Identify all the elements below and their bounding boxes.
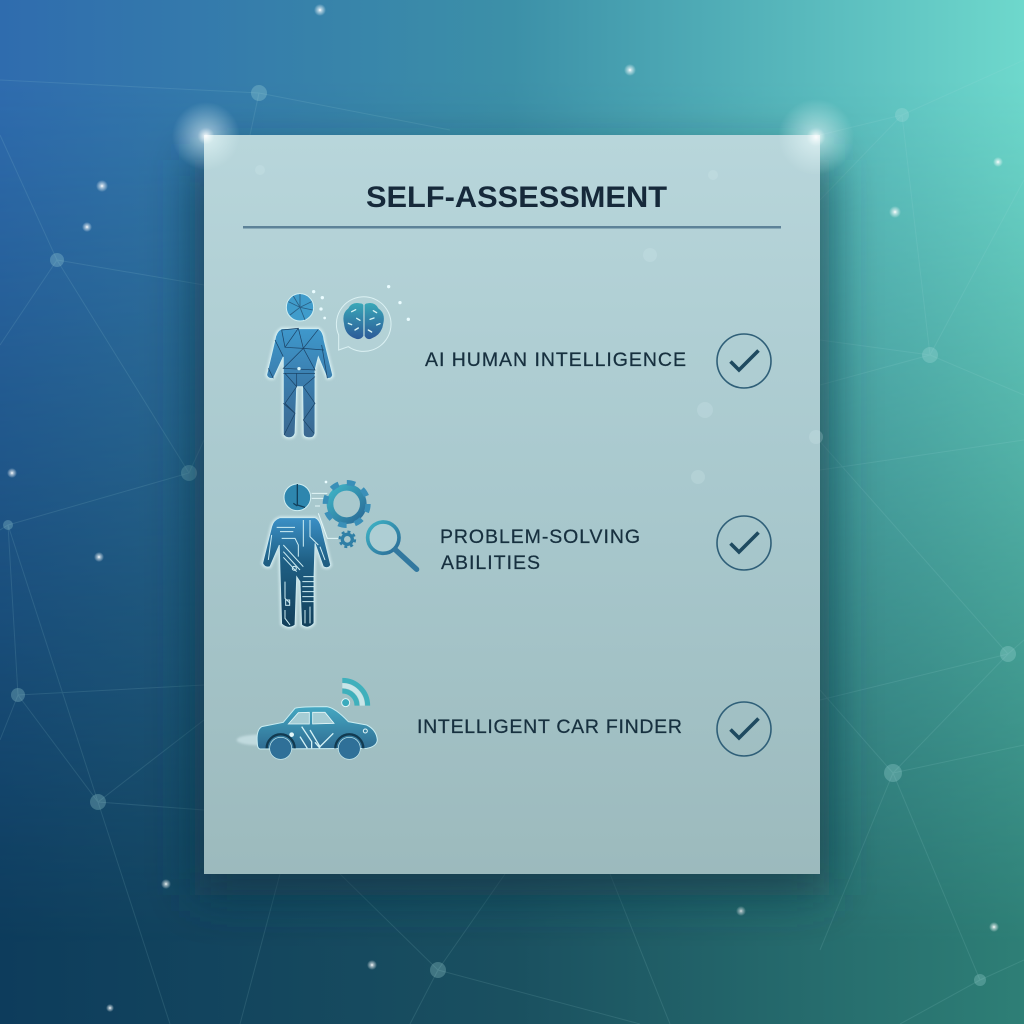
car body	[257, 707, 377, 749]
figure glow	[263, 518, 331, 627]
label: ABILITIES	[441, 552, 540, 574]
label: AI HUMAN INTELLIGENCE	[425, 349, 686, 371]
wheels	[267, 734, 363, 759]
corner glow left	[172, 102, 240, 170]
corner glow right	[778, 99, 854, 175]
thought bubble	[336, 297, 391, 351]
magnifier	[368, 522, 417, 569]
title: SELF-ASSESSMENT	[366, 181, 667, 214]
title divider	[243, 226, 781, 228]
large gear	[325, 483, 368, 525]
row: AI human intelligence	[267, 285, 771, 438]
row: problem-solving abilities	[263, 481, 771, 627]
panel faint network dots	[255, 165, 823, 484]
panel: self-assessment card	[172, 99, 854, 874]
small gear	[340, 532, 355, 547]
body	[267, 328, 333, 438]
label: INTELLIGENT CAR FINDER	[417, 716, 682, 738]
head	[286, 294, 314, 321]
panel shadow	[195, 160, 829, 895]
connector lines	[312, 493, 338, 538]
icon: human figure with brain	[267, 285, 410, 438]
sparkle dots	[312, 285, 410, 321]
row: intelligent car finder	[237, 680, 771, 759]
circuit traces	[300, 727, 333, 748]
body with circuit traces	[263, 518, 331, 627]
figure glow	[267, 329, 333, 438]
check mark	[717, 516, 771, 570]
windows	[288, 712, 334, 724]
wifi signal	[342, 680, 368, 707]
label: PROBLEM-SOLVING	[440, 526, 640, 548]
brain	[343, 303, 384, 339]
icon: circuit figure with gears and magnifier	[263, 481, 417, 627]
check mark	[717, 702, 771, 756]
check mark	[717, 334, 771, 388]
car glow	[237, 735, 280, 745]
head	[284, 484, 311, 511]
icon: car with wifi	[237, 680, 377, 759]
